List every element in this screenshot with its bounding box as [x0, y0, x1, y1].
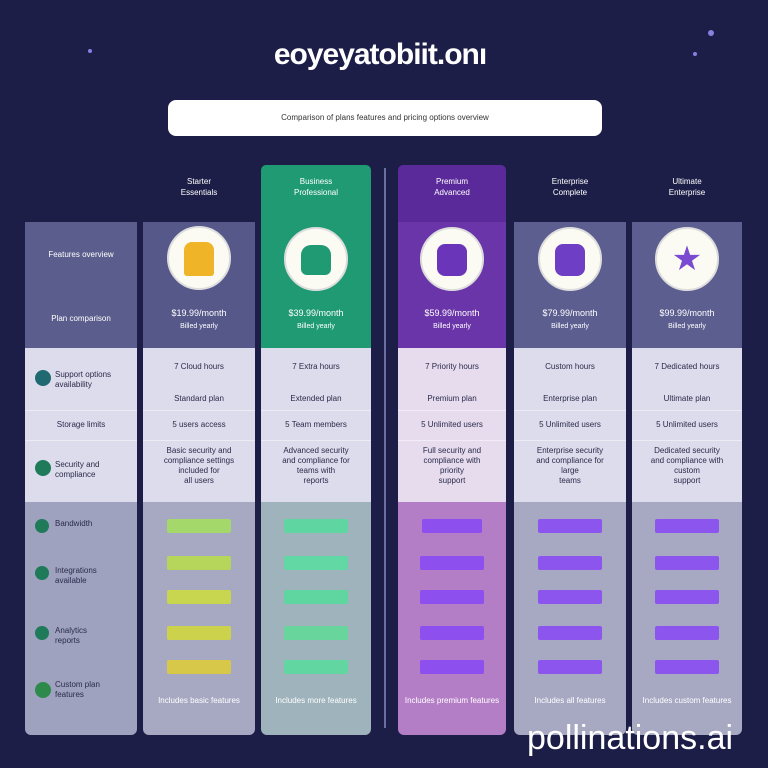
icon: purple — [420, 227, 484, 291]
panel: plan 3 (purple): 7 Priority hours — [425, 362, 479, 371]
panel: label column: Custom plan — [55, 680, 100, 689]
panel: plan 4: 5 Unlimited users — [539, 420, 601, 429]
panel: plan 2 (green): Extended plan — [290, 394, 342, 403]
panel: plan 3 (purple): Full security and — [423, 446, 481, 455]
panel: plan 3 (purple): 5 Unlimited users — [421, 420, 483, 429]
column headings: Essentials — [181, 188, 217, 197]
decorative dots — [88, 49, 92, 53]
text: Enterprise — [669, 188, 705, 197]
panel: plan 4: Custom hours — [545, 362, 595, 371]
panel: plan 5: custom — [674, 466, 700, 475]
panel: plan 2 (green): $39.99/month — [288, 308, 344, 318]
icon: star — [655, 227, 719, 291]
panel: plan 2 (green): and compliance for — [282, 456, 350, 465]
panel: plan 4: Includes all features — [534, 696, 606, 705]
panel: plan 3 (purple): compliance with — [424, 456, 480, 465]
panel: label column — [25, 222, 137, 735]
text: Business — [300, 177, 332, 186]
divider — [384, 168, 386, 728]
panel: plan 1: 7 Cloud hours — [174, 362, 224, 371]
column headings: Starter — [187, 177, 211, 186]
panel: plan 1: Basic security and — [167, 446, 231, 455]
panel: plan 5: Billed yearly — [668, 323, 706, 330]
panel: plan 4: Enterprise security — [537, 446, 603, 455]
panel: plan 5: Includes custom features — [643, 696, 731, 705]
panel: plan 2 (green): 7 Extra hours — [292, 362, 340, 371]
panel: plan 2 (green): Includes more features — [275, 696, 357, 705]
panel: plan 3 (purple) — [398, 222, 506, 735]
panel: plan 1: Billed yearly — [180, 323, 218, 330]
icon: green — [284, 227, 348, 291]
header band: green — [261, 165, 371, 225]
panel: label column: Plan comparison — [51, 314, 111, 323]
text: Ultimate — [672, 177, 702, 186]
text: Professional — [294, 188, 338, 197]
panel: plan 5: Ultimate plan — [664, 394, 710, 403]
panel: plan 2 (green) — [261, 225, 371, 735]
watermark: pollinations.ai — [527, 719, 733, 757]
text: Enterprise — [552, 177, 588, 186]
panel: label column: Bandwidth — [55, 519, 92, 528]
panel: plan 4: $79.99/month — [542, 308, 598, 318]
panel: plan 4: and compliance for — [536, 456, 604, 465]
panel: label column: Features overview — [48, 250, 114, 259]
panel: plan 1: all users — [184, 476, 214, 485]
panel: plan 3 (purple): $59.99/month — [424, 308, 480, 318]
icon: violet — [538, 227, 602, 291]
panel: plan 5: and compliance with — [651, 456, 723, 465]
panel: plan 4: Billed yearly — [551, 323, 589, 330]
text: Complete — [553, 188, 587, 197]
panel: plan 1: Includes basic features — [158, 696, 240, 705]
icon: yellow — [167, 226, 231, 290]
search bar: Comparison of plans features and pricing options overview — [281, 113, 489, 122]
panel: plan 3 (purple): support — [439, 476, 465, 485]
panel: plan 4 — [514, 222, 626, 735]
panel: label column: availability — [55, 380, 92, 389]
panel: label column: Integrations — [55, 566, 97, 575]
panel: plan 2 (green): reports — [304, 476, 328, 485]
panel: plan 2 (green): teams with — [297, 466, 335, 475]
panel: plan 2 (green): 5 Team members — [285, 420, 347, 429]
search bar — [168, 100, 602, 136]
text: Premium — [436, 177, 468, 186]
header band: purple — [398, 165, 506, 225]
panel: plan 2 (green): Billed yearly — [297, 323, 335, 330]
panel: label column: compliance — [55, 470, 95, 479]
panel: label column: features — [55, 690, 84, 699]
panel: plan 1 — [143, 222, 255, 735]
panel: plan 5: 7 Dedicated hours — [655, 362, 719, 371]
panel: plan 4: Enterprise plan — [543, 394, 597, 403]
panel: plan 3 (purple): Billed yearly — [433, 323, 471, 330]
panel: plan 5: 5 Unlimited users — [656, 420, 718, 429]
panel: plan 1: 5 users access — [172, 420, 226, 429]
panel: plan 1: compliance settings — [164, 456, 234, 465]
title: eoyeyatobiit.onı — [274, 38, 486, 71]
panel: label column: Support options — [55, 370, 111, 379]
panel: label column: Security and — [55, 460, 99, 469]
panel: plan 3 (purple): priority — [440, 466, 464, 475]
panel: label column: reports — [55, 636, 80, 645]
panel: plan 3 (purple): Premium plan — [427, 394, 477, 403]
panel: plan 5: support — [674, 476, 700, 485]
panel: plan 5: $99.99/month — [659, 308, 715, 318]
panel: plan 1: included for — [178, 466, 220, 475]
panel: plan 3 (purple): Includes premium features — [405, 696, 499, 705]
panel: plan 1: $19.99/month — [171, 308, 227, 318]
panel: label column: Analytics — [55, 626, 87, 635]
text: Advanced — [434, 188, 470, 197]
panel: label column: available — [55, 576, 87, 585]
column headings — [181, 177, 217, 197]
panel: plan 1: Standard plan — [174, 394, 224, 403]
panel: label column: Storage limits — [57, 420, 105, 429]
panel: plan 4: large — [561, 466, 579, 475]
panel: plan 5 — [632, 222, 742, 735]
panel: plan 2 (green): Advanced security — [283, 446, 349, 455]
icon: star: ★ — [672, 240, 702, 278]
panel: plan 4: teams — [559, 476, 581, 485]
panel: plan 5: Dedicated security — [654, 446, 720, 455]
